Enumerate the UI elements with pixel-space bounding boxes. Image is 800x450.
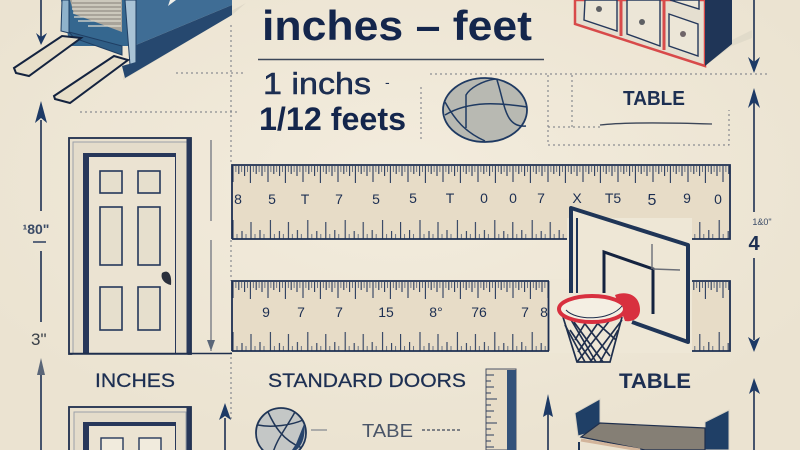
ruler: upper: 0: [714, 191, 722, 207]
ruler: lower: 8: [540, 304, 548, 320]
label: inches: INCHES: [95, 371, 175, 392]
dashed guides: [80, 25, 770, 420]
label: table lower: TABLE: [619, 370, 691, 393]
arrow: ruler gap: [207, 140, 215, 351]
arrow: lower left measure: [37, 358, 45, 450]
icon: lower door: [69, 407, 191, 450]
conversion text: 1 inchs: [263, 66, 371, 101]
arrow: upper right measure: [748, 0, 760, 212]
title: inches – feet: [262, 2, 532, 49]
icon: ball in title area: [443, 78, 527, 142]
ruler: upper: 5: [648, 192, 657, 209]
icon: cabinet with drawers: [575, 0, 752, 66]
arrow: upper left measure: [36, 0, 47, 45]
ruler: upper: T5: [605, 190, 621, 206]
ruler: upper: 7: [335, 191, 343, 207]
label: table upper: [600, 88, 712, 125]
label: standard doors: STANDARD DOORS: [268, 371, 466, 392]
ruler: upper: [232, 165, 730, 239]
icon: vertical ruler: [486, 369, 516, 450]
arrow: lower center-right: [543, 394, 553, 450]
icon: door: [69, 138, 232, 354]
ruler: upper: 0: [509, 190, 517, 206]
label: table with leader: TABE: [362, 421, 413, 441]
conversion text: [259, 66, 406, 137]
label: table upper: TABLE: [623, 88, 685, 110]
ruler: upper: 0: [480, 190, 488, 206]
label: right top measure: 1&0": [752, 217, 772, 227]
ruler: upper: 5: [372, 191, 380, 207]
label: door height: ¹80": [23, 221, 49, 237]
ruler: upper: T: [301, 191, 310, 207]
ruler: lower: 7: [521, 304, 529, 320]
title rule: [258, 58, 544, 60]
label: 4: 4: [748, 233, 760, 255]
ruler: upper: T: [446, 190, 455, 206]
arrow: lower center-left: [219, 403, 231, 450]
ruler: lower: 7: [297, 304, 305, 320]
ruler: upper: 7: [537, 190, 545, 206]
arrow: door height: [35, 101, 47, 322]
ruler: lower: 15: [378, 304, 394, 320]
ruler: upper: 9: [683, 190, 691, 206]
ruler: lower: 8°: [429, 304, 443, 320]
icon: printer-like machine with ramps: [14, 0, 246, 103]
ruler: upper: 5: [409, 190, 417, 206]
arrow: right mid measure: [748, 258, 760, 352]
arrow: right lower measure: [749, 378, 760, 450]
ruler: lower: 9: [262, 304, 270, 320]
ruler: lower: [232, 281, 730, 351]
icon: lower basketball: [256, 408, 306, 450]
icon: basketball hoop: [548, 208, 692, 362]
conversion text: 1/12 feets: [259, 101, 406, 137]
ruler: upper: 8: [234, 191, 242, 207]
ruler: upper: X: [572, 190, 582, 206]
icon: lower table: [575, 399, 729, 450]
ruler: upper: 5: [268, 191, 276, 207]
label: 3 inches: 3": [31, 330, 46, 349]
conversion text: -: [385, 74, 390, 90]
ruler: lower: 7: [335, 304, 343, 320]
ruler: lower: 76: [471, 304, 487, 320]
